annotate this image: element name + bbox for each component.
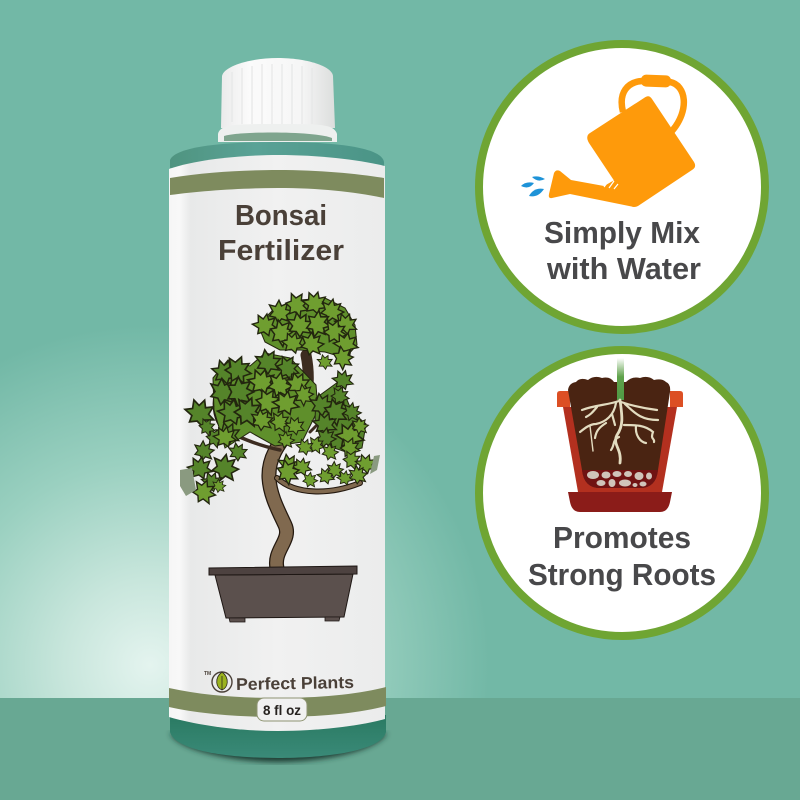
bottle label — [169, 155, 385, 731]
trunk and branches — [214, 355, 360, 568]
callout text: with Water — [546, 251, 701, 286]
bonsai pot — [209, 566, 357, 622]
pot inner — [568, 377, 670, 488]
drainage gravel — [587, 471, 652, 487]
product title: Bonsai — [235, 200, 327, 232]
icon: potted plant roots — [557, 358, 683, 512]
top olive band — [170, 170, 384, 198]
bottle liquid top — [170, 142, 384, 168]
left lower foliage — [180, 395, 251, 508]
product title: Fertilizer — [218, 235, 344, 267]
volume badge — [257, 698, 307, 721]
brand logo: TM — [204, 671, 211, 677]
table surface — [0, 698, 800, 800]
volume badge: 8 fl oz — [263, 702, 301, 718]
product bottle — [169, 58, 387, 762]
bottle shadow — [170, 733, 387, 762]
water drops — [521, 176, 545, 196]
right canopy foliage — [306, 368, 372, 462]
roots — [580, 400, 658, 463]
callout: simply mix with water — [479, 44, 765, 330]
callout text — [528, 520, 716, 592]
lower right foliage — [274, 433, 380, 490]
pot rim — [557, 391, 683, 407]
pot saucer — [568, 492, 672, 512]
bonsai tree — [180, 289, 380, 568]
stem — [617, 358, 624, 400]
bottle liquid bottom — [170, 715, 386, 758]
top crown foliage — [251, 289, 361, 371]
icon: watering can — [521, 74, 695, 207]
pot body — [563, 407, 677, 492]
callout text — [544, 215, 701, 286]
can handle — [622, 81, 684, 131]
brand logo: Perfect Plants — [236, 673, 354, 694]
callout text: Strong Roots — [528, 557, 716, 592]
bottle cap — [218, 58, 337, 142]
callout text: Simply Mix — [544, 215, 701, 250]
product title — [218, 200, 344, 267]
middle canopy foliage — [204, 345, 318, 451]
can spout — [549, 170, 634, 207]
brand logo — [204, 671, 354, 694]
bottom olive band — [169, 687, 386, 717]
can body — [587, 96, 695, 207]
callout: promotes strong roots — [479, 350, 765, 636]
callout text: Promotes — [553, 520, 691, 555]
